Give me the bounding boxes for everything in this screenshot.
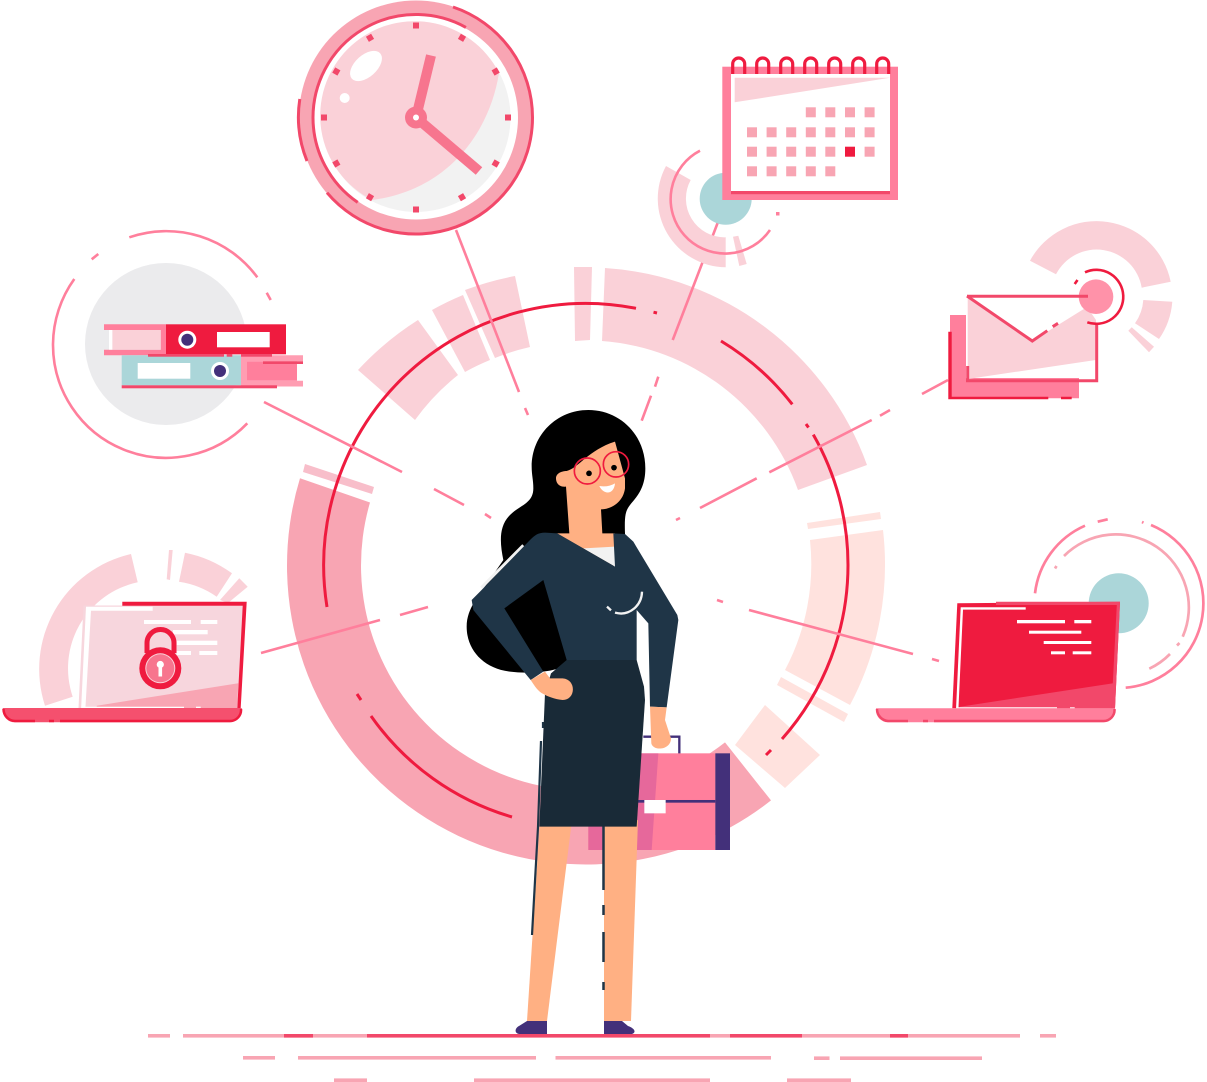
ground lines xyxy=(148,1034,1056,1082)
gap by the hip xyxy=(546,673,555,679)
icon: calendar xyxy=(658,58,898,267)
icon: locked laptop xyxy=(3,550,248,722)
sleeve highlight xyxy=(481,545,523,588)
legs xyxy=(527,722,638,1021)
icon: red laptop xyxy=(876,519,1203,722)
shoes xyxy=(516,1021,635,1034)
face and neck xyxy=(556,442,625,567)
central segmented ring xyxy=(287,267,885,865)
briefcase xyxy=(588,737,730,850)
skirt xyxy=(539,660,645,827)
pocket accent xyxy=(607,592,642,613)
icon: clock xyxy=(298,0,533,234)
woman with briefcase xyxy=(467,410,730,1034)
icon: binders xyxy=(53,231,303,458)
icon: email envelope xyxy=(948,221,1172,399)
smile xyxy=(599,483,615,492)
lower hand xyxy=(650,707,671,749)
hand on hip xyxy=(531,672,573,700)
thin red orbit arcs xyxy=(324,303,848,817)
shirt xyxy=(583,547,615,567)
jacket xyxy=(472,533,678,707)
hair xyxy=(467,410,645,673)
connector lines xyxy=(261,222,948,661)
glasses and eyes xyxy=(574,452,629,484)
icon: padlock xyxy=(139,630,181,689)
